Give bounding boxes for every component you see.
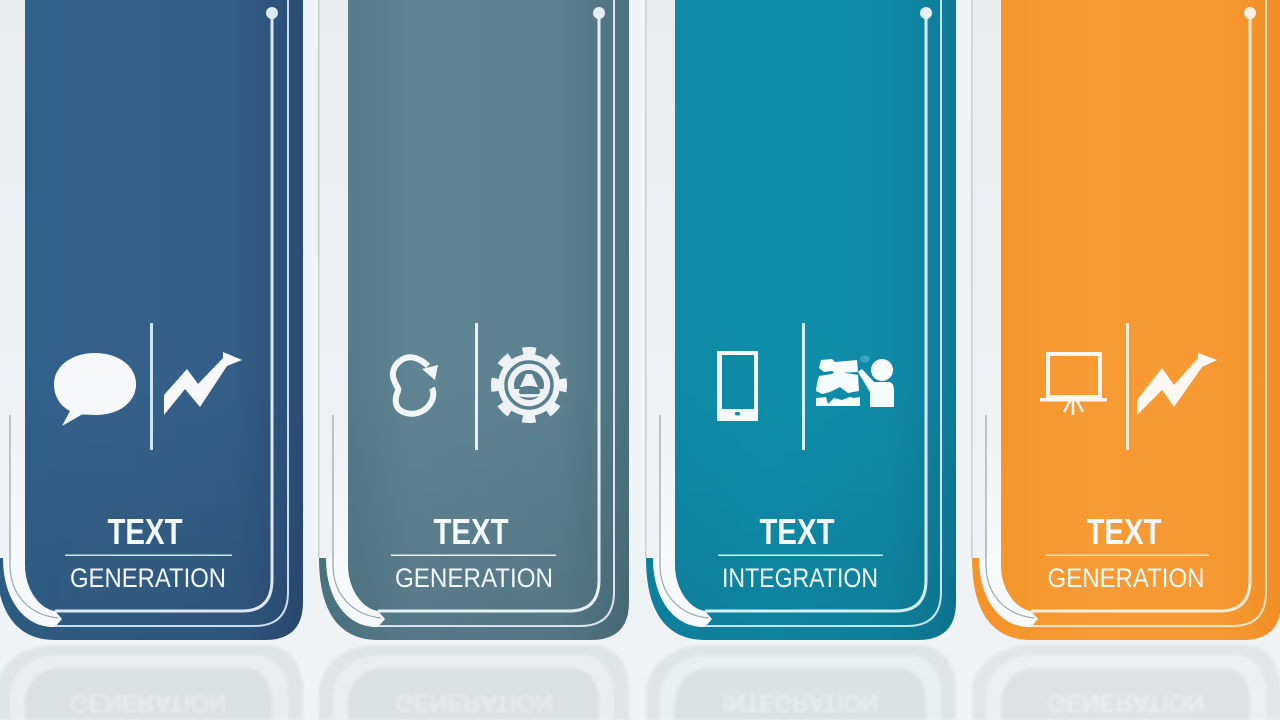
heading: TEXT: [760, 511, 834, 552]
heading: TEXT: [434, 511, 508, 552]
heading: TEXT: [1086, 511, 1162, 552]
heading: TEXT: [108, 511, 182, 552]
reflection: GENERATION: [1048, 689, 1204, 716]
panel: blue text generation: [0, 0, 318, 720]
heading rule: [718, 554, 883, 556]
reflection: [972, 645, 1280, 720]
panel: slate text generation: [318, 0, 645, 720]
subheading: GENERATION: [395, 563, 553, 593]
reflection: [0, 645, 303, 720]
divider: [475, 323, 478, 450]
reflection: GENERATION: [70, 689, 226, 716]
subheading: GENERATION: [70, 563, 226, 593]
icon: speech bubble: [54, 353, 136, 426]
card shape: [318, 0, 645, 640]
reflection: [646, 645, 956, 720]
reflection: INTEGRATION: [722, 689, 878, 716]
heading rule: [391, 554, 556, 556]
divider: [802, 323, 805, 450]
divider: [150, 323, 153, 450]
icon: gear with person: [495, 351, 563, 419]
subheading: GENERATION: [1048, 563, 1204, 593]
reflection: GENERATION: [395, 689, 553, 716]
card shape: [645, 0, 972, 640]
reflection: [319, 645, 629, 720]
icon: refresh loop: [393, 357, 438, 414]
icon: smartphone: [717, 351, 758, 421]
icon: zigzag arrow: [1137, 353, 1217, 415]
divider: [1126, 323, 1129, 450]
icon: handshake and person: [816, 356, 894, 407]
heading rule: [1046, 554, 1209, 556]
subheading: INTEGRATION: [722, 563, 878, 593]
icon: zigzag arrow: [164, 352, 242, 415]
heading rule: [65, 554, 232, 556]
icon: presentation board: [1040, 354, 1107, 415]
card shape: [0, 0, 318, 640]
panel: orange text generation: [971, 0, 1280, 720]
panel: teal integration: [645, 0, 972, 720]
card shape: [971, 0, 1280, 640]
